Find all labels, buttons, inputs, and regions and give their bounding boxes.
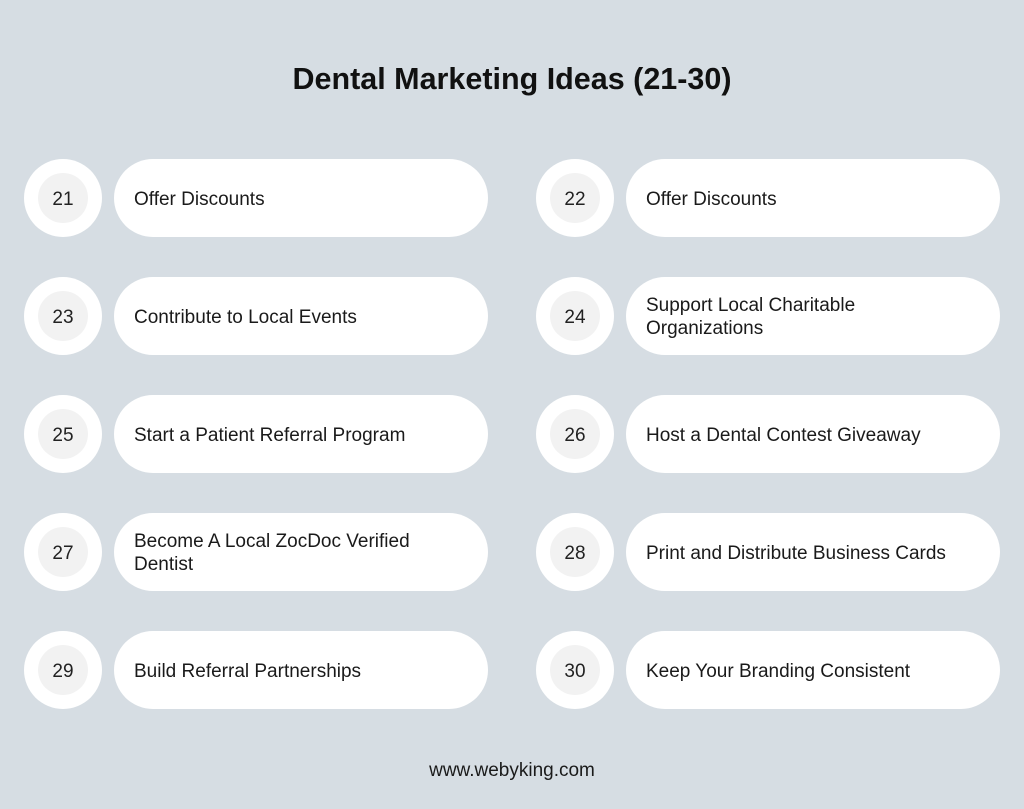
item 22: 22 — [564, 188, 586, 210]
item 21: Offer Discounts — [134, 188, 265, 210]
item 29 — [24, 631, 488, 709]
item 21 — [24, 159, 488, 237]
item 30: 30 — [564, 660, 586, 682]
item 23 — [24, 277, 488, 355]
item 25: 25 — [52, 424, 74, 446]
item 24 — [536, 277, 1000, 355]
item 27: Become A Local ZocDoc Verified Dentist — [134, 531, 410, 575]
footer url: www.webyking.com — [429, 760, 595, 781]
item 27: 27 — [52, 542, 74, 564]
item 24: Support Local Charitable Organizations — [646, 295, 855, 339]
item 22 — [536, 159, 1000, 237]
item 30: Keep Your Branding Consistent — [646, 660, 910, 682]
item 30 — [536, 631, 1000, 709]
item 29: Build Referral Partnerships — [134, 660, 361, 682]
item 23: Contribute to Local Events — [134, 306, 357, 328]
item 25: Start a Patient Referral Program — [134, 424, 405, 446]
item 28: 28 — [564, 542, 586, 564]
item 23: 23 — [52, 306, 74, 328]
item 29: 29 — [52, 660, 74, 682]
title: Dental Marketing Ideas (21-30) — [292, 62, 732, 96]
item 26: Host a Dental Contest Giveaway — [646, 424, 921, 446]
item 24: 24 — [564, 306, 586, 328]
item 27 — [24, 513, 488, 591]
item 28: Print and Distribute Business Cards — [646, 542, 946, 564]
item 26: 26 — [564, 424, 586, 446]
item 21: 21 — [52, 188, 74, 210]
item 22: Offer Discounts — [646, 188, 777, 210]
item 28 — [536, 513, 1000, 591]
item 25 — [24, 395, 488, 473]
item 26 — [536, 395, 1000, 473]
